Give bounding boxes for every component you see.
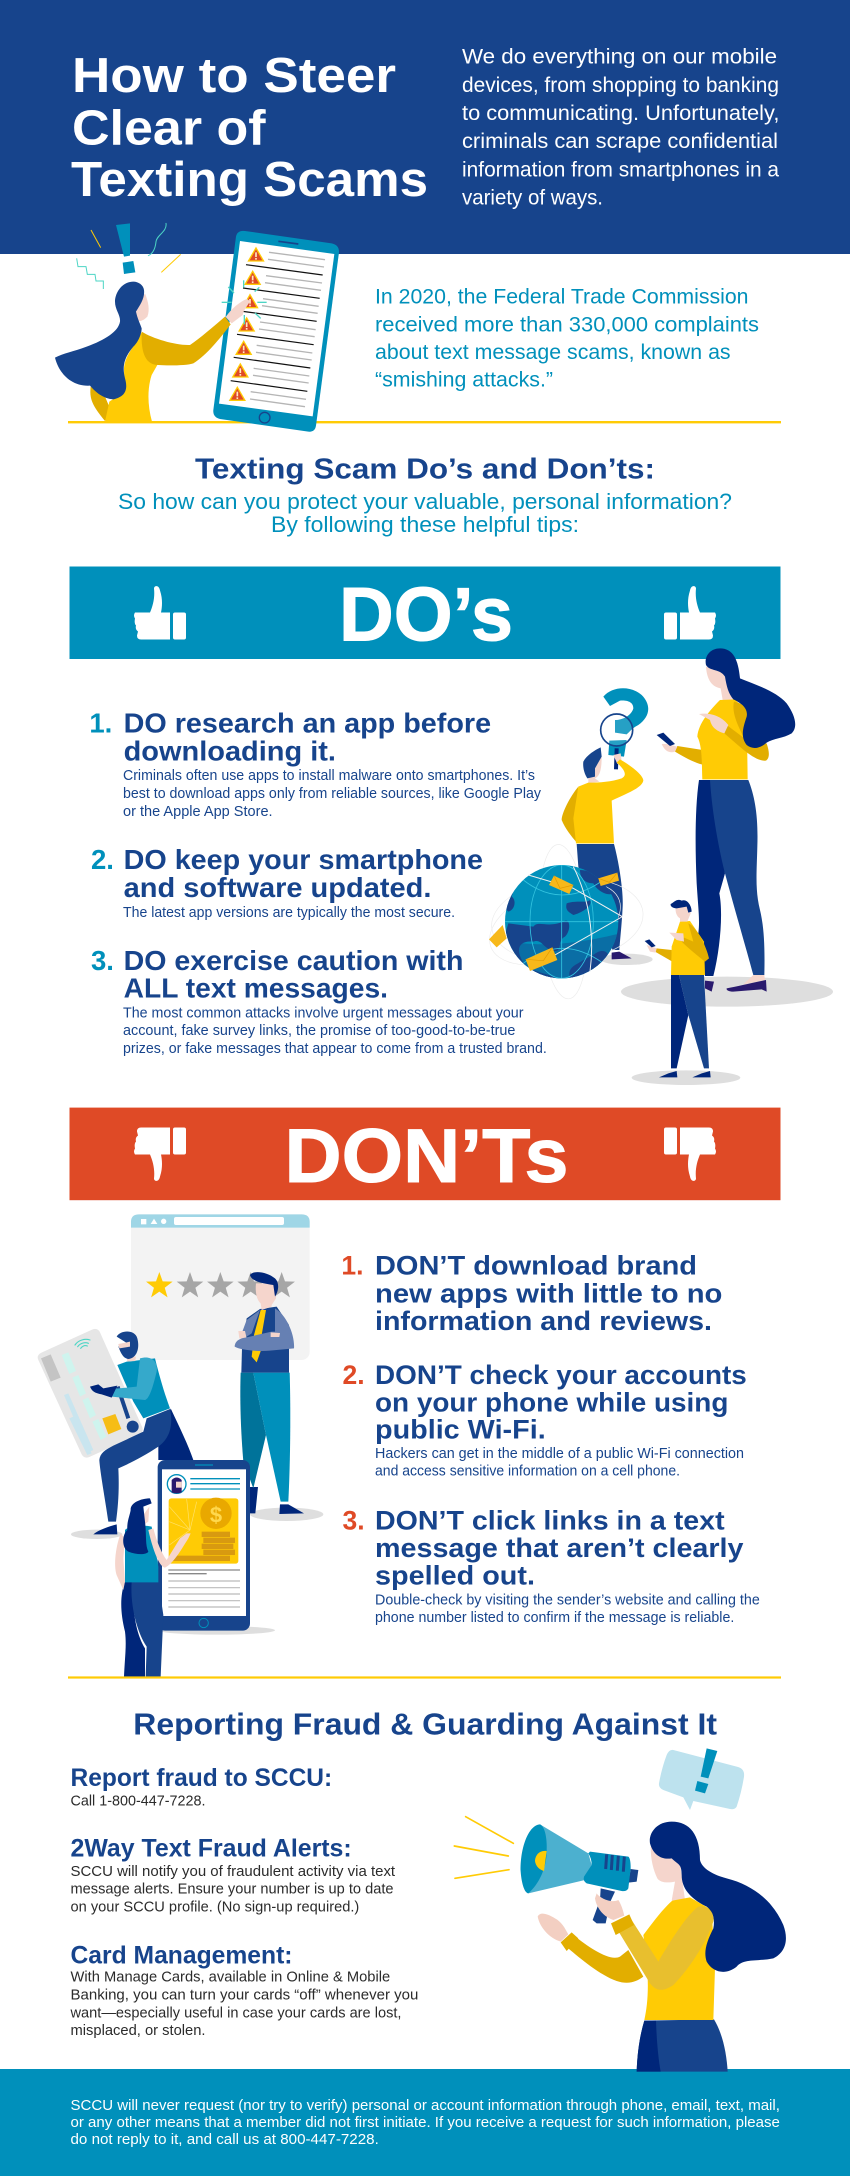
title (71, 49, 428, 207)
tip 1: information and reviews. (375, 1306, 712, 1336)
text block: report fraud: Report fraud to SCCU: (70, 1764, 332, 1792)
intro paragraph: devices, from shopping to banking (462, 74, 779, 97)
tip 3: phone number listed to confirm if the message is reliable. (375, 1610, 734, 1626)
tip 2: DO keep your smartphone (124, 844, 483, 875)
tip 2: and access sensitive information on a cell phone. (375, 1464, 680, 1480)
tip 3 (342, 1505, 760, 1626)
tip 1 (341, 1250, 722, 1336)
tip 3: 3. (91, 945, 114, 976)
list: do's tips (89, 708, 547, 1057)
yellow divider (68, 1676, 781, 1679)
tip 3: The most common attacks involve urgent messages about your (123, 1005, 524, 1021)
text block: card management: want—especially useful in case your cards are lost, (70, 2004, 401, 2021)
title: How to Steer (72, 49, 396, 103)
speech bubble with exclamation (659, 1748, 744, 1810)
tip 1: DO research an app before (124, 708, 491, 738)
section subheading (118, 489, 732, 537)
text block: text fraud alerts: 2Way Text Fraud Alerts: (70, 1834, 352, 1862)
tip 1: 1. (89, 708, 112, 738)
text block: text fraud alerts: message alerts. Ensure your number is up to date (70, 1881, 394, 1898)
icon: phone with coin offer (158, 1460, 250, 1631)
tip 3: Double-check by visiting the sender’s website and calling the (375, 1592, 760, 1608)
banner: do's (70, 566, 780, 659)
tip 1: downloading it. (124, 735, 336, 766)
section subheading: By following these helpful tips: (271, 512, 579, 537)
tip 2: on your phone while using (375, 1387, 728, 1417)
banner: don'ts (70, 1108, 780, 1200)
text block: card management (70, 1941, 418, 2039)
intro paragraph (462, 46, 779, 210)
icon: megaphone (521, 1824, 638, 1923)
icon: thumbs down right (664, 1128, 716, 1181)
tip 1: DON’T download brand (375, 1250, 697, 1280)
icon: exclamation mark and sparks (77, 223, 181, 289)
statistic text: about text message scams, known as (375, 340, 731, 364)
shadows (601, 954, 833, 1085)
tip 2: 2. (91, 844, 114, 875)
title: Texting Scams (71, 153, 428, 207)
text block: report fraud: Call 1-800-447-7228. (70, 1792, 206, 1809)
intro paragraph: to communicating. Unfortunately, (462, 102, 779, 125)
section heading: reporting fraud: Reporting Fraud & Guarding Against It (133, 1706, 717, 1741)
intro paragraph: information from smartphones in a (462, 158, 779, 181)
tip 1: or the Apple App Store. (123, 804, 273, 820)
tip 3: spelled out. (375, 1560, 535, 1590)
header band (0, 0, 850, 254)
footer notice: do not reply to it, and call us at 800-447-7228. (70, 2131, 379, 2148)
tip 3: DO exercise caution with (124, 945, 463, 976)
illustration: woman with megaphone (454, 1748, 786, 2072)
yellow divider (68, 421, 781, 423)
text block: card management: With Manage Cards, available in Online & Mobile (70, 1969, 390, 1986)
tip 2: DON’T check your accounts (375, 1360, 747, 1390)
tip 3: prizes, or fake messages that appear to come from a trusted brand. (123, 1041, 547, 1057)
intro paragraph: We do everything on our mobile (462, 46, 777, 69)
figure: woman (538, 1822, 786, 2072)
footer notice: or any other means that a member did not first initiate. If you receive a request for such information, please (70, 2114, 780, 2131)
figure: tall woman (657, 648, 795, 992)
text block: report fraud (70, 1764, 332, 1809)
text block: text fraud alerts (70, 1834, 396, 1915)
icon: thumbs down left (134, 1128, 186, 1181)
figure: man with magnifier (562, 688, 648, 959)
list: don'ts tips (341, 1250, 760, 1626)
tip 2: public Wi-Fi. (375, 1415, 546, 1445)
text block: text fraud alerts: SCCU will notify you of fraudulent activity via text (70, 1863, 396, 1880)
figure: thief carrying credit card (38, 1329, 193, 1534)
sound rays (454, 1817, 513, 1878)
icon: phone with alerts (213, 231, 339, 432)
tip 2: Hackers can get in the middle of a public Wi-Fi connection (375, 1446, 744, 1462)
tip 2: The latest app versions are typically the most secure. (123, 905, 455, 921)
tip 3: account, fake survey links, the promise of too-good-to-be-true (123, 1023, 515, 1039)
tip 3: message that aren’t clearly (375, 1533, 744, 1563)
illustration: people, globe and question mark (478, 648, 833, 1085)
figure: woman touching phone (115, 1498, 191, 1677)
heading: don'ts: DON’Ts (284, 1114, 568, 1199)
text block: text fraud alerts: on your SCCU profile. (No sign-up required.) (70, 1898, 359, 1915)
tip 3: ALL text messages. (124, 973, 388, 1004)
tip 3: 3. (342, 1505, 365, 1535)
statistic text: “smishing attacks.” (375, 367, 553, 391)
icon: thumbs up left (134, 586, 186, 640)
statistic text: In 2020, the Federal Trade Commission (375, 285, 748, 309)
statistic text: received more than 330,000 complaints (375, 312, 759, 336)
footer notice: SCCU will never request (nor try to verify) personal or account information through phone, email, text, mail, (70, 2097, 780, 2114)
tip 1: new apps with little to no (375, 1278, 722, 1308)
icon: thumbs up right (664, 586, 716, 640)
tip 2 (91, 844, 483, 921)
tip 1 (89, 708, 542, 820)
figure: small man with phone (645, 900, 711, 1077)
figure: woman (55, 282, 250, 422)
tip 2: 2. (342, 1360, 365, 1390)
tip 1: Criminals often use apps to install malware onto smartphones. It’s (123, 768, 535, 784)
statistic text (375, 285, 759, 391)
figure: man in suit (235, 1272, 304, 1514)
intro paragraph: variety of ways. (462, 187, 603, 210)
text block: card management: Banking, you can turn your cards “off” whenever you (70, 1987, 418, 2004)
shadows (71, 1508, 323, 1635)
intro paragraph: criminals can scrape confidential (462, 130, 778, 153)
text block: card management: misplaced, or stolen. (70, 2022, 206, 2039)
browser window with star rating (131, 1214, 310, 1360)
section subheading: So how can you protect your valuable, personal information? (118, 489, 732, 514)
text block: card management: Card Management: (70, 1941, 292, 1969)
tip 2: and software updated. (124, 872, 431, 903)
icon: globe with envelopes (489, 844, 644, 999)
tip 2 (342, 1360, 747, 1480)
footer notice (70, 2097, 780, 2148)
illustration: woman tapping phone alerts (55, 223, 339, 432)
title: Clear of (72, 102, 266, 156)
section heading: do's and don'ts: Texting Scam Do’s and Don’ts: (195, 454, 655, 486)
heading: do's: DO’s (339, 573, 513, 658)
tip 3 (91, 945, 547, 1057)
icon: phone with coin offer: $ (210, 1502, 222, 1527)
tip 1: 1. (341, 1250, 364, 1280)
footer band (0, 2069, 850, 2176)
tip 1: best to download apps only from reliable sources, like Google Play (123, 786, 542, 802)
illustration: review window, thief, card and phone (38, 1214, 323, 1677)
tip 3: DON’T click links in a text (375, 1505, 725, 1535)
